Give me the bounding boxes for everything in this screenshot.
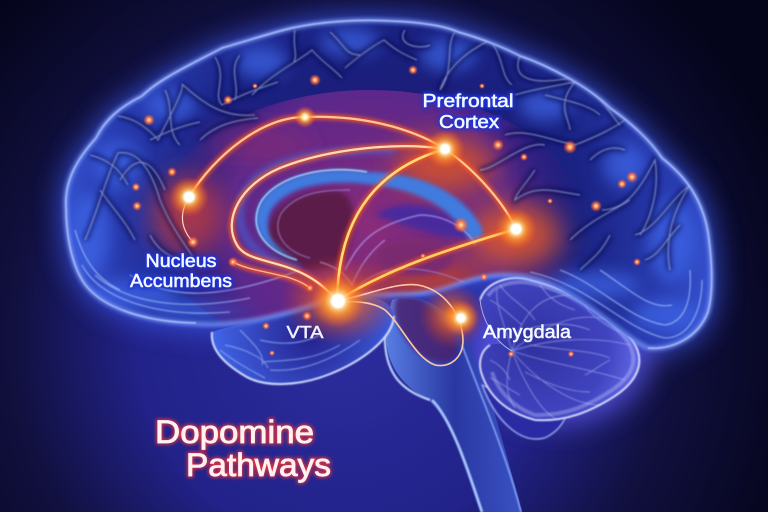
outer brain glow	[66, 20, 712, 424]
node: amygdala	[443, 300, 479, 336]
title: Dopomine	[155, 414, 314, 450]
central glow	[180, 90, 566, 324]
label: Nucleus Accumbens	[130, 251, 232, 291]
label: Prefrontal Cortex: Cortex	[439, 112, 499, 132]
cerebellum	[480, 278, 639, 420]
node: prefrontal cortex	[425, 129, 465, 169]
title: Pathways	[186, 447, 331, 483]
label: Prefrontal Cortex: Cortex	[439, 112, 499, 132]
sulci highlights	[85, 30, 690, 270]
warm glows	[152, 127, 561, 300]
small spark nodes	[132, 65, 641, 358]
blue crescent	[256, 170, 482, 260]
cerebrum	[66, 20, 712, 360]
label: Nucleus Accumbens: Accumbens	[130, 271, 232, 291]
label: Prefrontal Cortex: Prefrontal	[422, 91, 514, 111]
pathway strokes	[182, 117, 516, 366]
title: Dopomine	[155, 414, 314, 450]
node: upper arc	[294, 106, 316, 128]
frontal lower lines	[75, 230, 702, 338]
title	[155, 414, 331, 483]
amygdala orange glow	[418, 282, 486, 350]
label: Amygdala: Amygdala	[483, 322, 572, 342]
title: Pathways	[186, 447, 331, 483]
dopamine pathways	[182, 117, 516, 366]
label: Nucleus Accumbens: Accumbens	[130, 271, 232, 291]
brainstem	[385, 295, 522, 512]
node: VTA	[311, 274, 365, 328]
temporal lobe	[212, 297, 394, 384]
label: Nucleus Accumbens: Nucleus	[146, 251, 216, 271]
label: Nucleus Accumbens: Nucleus	[146, 251, 216, 271]
label: VTA: VTA	[286, 322, 324, 342]
cerebrum outline	[66, 20, 712, 348]
gyri highlights	[70, 28, 697, 331]
node: right cortex	[495, 208, 537, 250]
label: Prefrontal Cortex: Prefrontal	[422, 91, 514, 111]
pathway glow	[189, 117, 516, 301]
label: Prefrontal Cortex	[422, 91, 514, 132]
node: nucleus accumbens	[169, 177, 209, 217]
lower cerebellar lobe	[482, 385, 568, 439]
VTA orange glow	[280, 254, 400, 346]
sulci shadows	[85, 30, 690, 270]
inner dark core	[267, 190, 353, 270]
